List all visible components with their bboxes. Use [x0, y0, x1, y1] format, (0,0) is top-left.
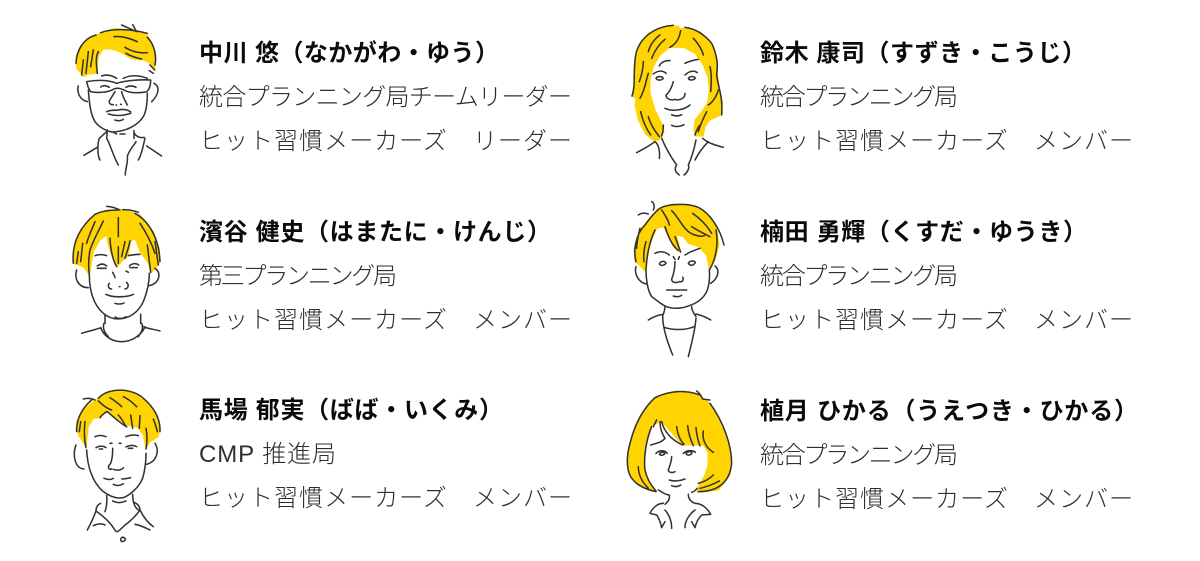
portrait: Nakagawa Yu	[76, 25, 162, 175]
text: Hamaya Kenji: 第三プランニング局	[199, 263, 397, 290]
text: Nakagawa Yu: ヒット習慣メーカーズ リーダー	[199, 128, 572, 155]
text: Baba Ikumi	[199, 397, 572, 512]
text: Suzuki Koji	[760, 40, 1133, 155]
text: Baba Ikumi: ヒット習慣メーカーズ メンバー	[199, 485, 572, 512]
text: Nakagawa Yu: 統合プランニング局チームリーダー	[199, 84, 572, 111]
text: Suzuki Koji: 統合プランニング局	[760, 84, 958, 111]
text: Kusuda Yuki: 統合プランニング局	[760, 263, 958, 290]
text: Uetsuki Hikaru	[760, 398, 1138, 513]
text: Hamaya Kenji	[199, 219, 572, 334]
text: Nakagawa Yu: 中川 悠（なかがわ・ゆう）	[199, 39, 499, 67]
portrait: Kusuda Yuki	[634, 202, 724, 357]
text: Hamaya Kenji: ヒット習慣メーカーズ メンバー	[199, 307, 572, 334]
text: Kusuda Yuki: 楠田 勇輝（くすだ・ゆうき）	[760, 219, 1087, 246]
text: Kusuda Yuki: ヒット習慣メーカーズ メンバー	[760, 307, 1133, 334]
text: Baba Ikumi: 馬場 郁実（ばば・いくみ）	[199, 397, 503, 424]
portrait: Baba Ikumi	[74, 390, 160, 542]
text: Uetsuki Hikaru: ヒット習慣メーカーズ メンバー	[760, 486, 1133, 513]
portrait: Hamaya Kenji	[73, 206, 160, 342]
text: Nakagawa Yu	[199, 39, 572, 155]
text: Hamaya Kenji: 濱谷 健史（はまたに・けんじ）	[199, 219, 551, 246]
text: Baba Ikumi: CMP 推進局	[199, 441, 336, 468]
text: Uetsuki Hikaru: 植月 ひかる（うえつき・ひかる）	[760, 398, 1138, 425]
portrait: Suzuki Koji	[632, 25, 723, 175]
portrait: Uetsuki Hikaru	[627, 391, 732, 528]
text: Suzuki Koji: 鈴木 康司（すずき・こうじ）	[760, 40, 1086, 67]
text: Uetsuki Hikaru: 統合プランニング局	[760, 442, 958, 469]
text: Kusuda Yuki	[760, 219, 1133, 334]
text: Suzuki Koji: ヒット習慣メーカーズ メンバー	[760, 128, 1133, 155]
